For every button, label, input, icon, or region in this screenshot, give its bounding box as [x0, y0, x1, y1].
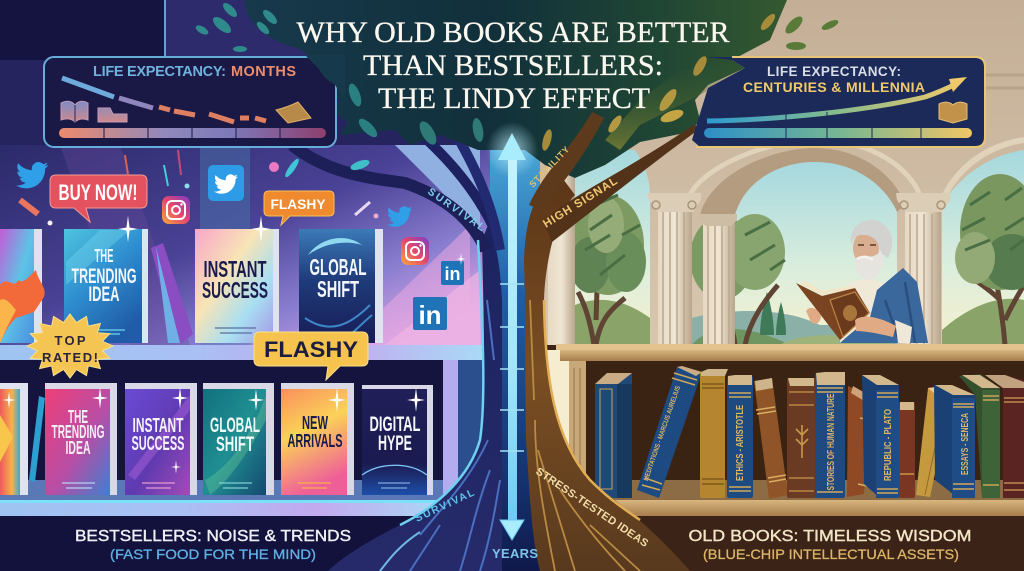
panel: bestsellers background	[0, 0, 520, 571]
book: tilted blue spine	[29, 396, 45, 482]
book: The Trending Idea, top row: IDEA	[88, 283, 120, 306]
label: stress-tested ideas: STRESS-TESTED IDEAS	[533, 466, 650, 550]
book: The Trending Idea, top row: TRENDING	[72, 265, 136, 288]
icon: twitter bird, right	[387, 206, 412, 227]
caption: bestsellers: (FAST FOOD FOR THE MIND)	[110, 546, 316, 562]
badge: flashy, orange: FLASHY	[270, 197, 326, 212]
tree trunk and roots: right	[524, 175, 690, 571]
book: Instant Success, bottom row	[125, 383, 197, 495]
olive trees	[570, 174, 1024, 345]
icon: instagram, upper	[162, 196, 190, 224]
rising arrow	[707, 83, 958, 121]
book: The Trending Idea, bottom row: IDEA	[66, 438, 90, 458]
bookshelf: bestsellers shelves	[0, 345, 482, 516]
book: Global Shift, bottom row: GLOBAL	[210, 414, 260, 437]
book: New Arrivals, bottom row	[281, 383, 354, 495]
confetti	[20, 150, 378, 226]
icon: linkedin small: in	[444, 264, 460, 284]
label: stability: STABILITY	[527, 144, 571, 189]
tree canopy	[245, 0, 787, 178]
book: blue unmarked	[595, 373, 632, 498]
book: Essays by Seneca: ESSAYS - SENECA	[960, 413, 971, 475]
book: small red volume	[899, 402, 915, 498]
icon: open book	[939, 102, 967, 123]
tree trunk and roots: left	[292, 115, 502, 571]
title: THE LINDY EFFECT	[378, 82, 650, 115]
book: tilted purple spine	[151, 243, 193, 343]
book: Republic by Plato	[862, 375, 899, 498]
icon: linkedin large: in	[418, 300, 442, 330]
foliage over months panel	[305, 55, 345, 100]
book: The Trending Idea, top row: THE	[94, 246, 114, 266]
badge: flashy, large gold: FLASHY	[264, 337, 358, 362]
book: brown tome	[787, 378, 816, 498]
panel: life expectancy months: MONTHS	[231, 64, 296, 80]
book: Global Shift, top row: SHIFT	[317, 276, 359, 302]
book: Digital Hype, bottom row	[362, 385, 433, 495]
icon: linkedin small	[441, 253, 466, 285]
book: New Arrivals, bottom row: NEW	[302, 413, 328, 433]
book: Instant Success, top row	[195, 216, 279, 343]
icon: instagram, right	[401, 237, 429, 265]
book: Republic by Plato: REPUBLIC - PLATO	[883, 409, 894, 481]
badge: top rated	[27, 314, 113, 378]
book: Digital Hype, bottom row: HYPE	[378, 432, 412, 455]
panel: life expectancy centuries: CENTURIES & MILLENNIA	[743, 79, 925, 95]
panel heading: LIFE EXPECTANCY:	[767, 64, 901, 79]
title	[296, 16, 730, 115]
bookshelf: old books	[520, 344, 1024, 571]
badge: flashy, orange	[264, 191, 334, 225]
book: The Trending Idea, bottom row: TRENDING	[52, 422, 104, 442]
panel: life expectancy months	[44, 57, 336, 147]
label: survival on branch: SURVIVAL	[425, 186, 488, 234]
book: Global Shift, bottom row	[203, 383, 274, 495]
book: New Arrivals, bottom row: ARRIVALS	[288, 431, 342, 451]
timeline bar	[704, 128, 972, 138]
icon: worn golden book	[276, 102, 311, 123]
columns and capitals	[548, 165, 950, 350]
timeline bar	[59, 128, 326, 138]
badge: top rated: RATED!	[42, 350, 98, 365]
book: Ethics by Aristotle	[727, 375, 753, 498]
central years arrow	[486, 122, 538, 561]
book: The Trending Idea, top row	[64, 216, 148, 343]
book: maroon volume	[985, 375, 1024, 498]
book: The Trending Idea, bottom row	[45, 383, 117, 495]
badge: buy now	[50, 175, 147, 222]
leaves	[194, 1, 840, 172]
book: Stories of Human Nature: STORIES OF HUMAN NATURE	[826, 393, 837, 490]
book: Instant Success, top row: SUCCESS	[202, 277, 268, 303]
badge: buy now: BUY NOW!	[58, 180, 138, 205]
book: green volume	[959, 374, 1000, 498]
book: Meditations by Marcus Aurelius: MEDITATIONS - MARCUS AURELIUS	[643, 385, 682, 482]
book: Essays by Seneca	[934, 385, 975, 498]
centre band between the trunks	[490, 145, 540, 571]
icon: twitter bird, far left	[16, 162, 48, 188]
panel heading: LIFE EXPECTANCY:	[93, 64, 226, 80]
book: Global Shift, top row: GLOBAL	[310, 254, 366, 280]
icons: crumbling books	[61, 101, 127, 122]
caption: bestsellers: BESTSELLERS: NOISE & TRENDS	[75, 528, 351, 545]
caption: old books: (BLUE-CHIP INTELLECTUAL ASSETS)	[703, 546, 959, 562]
icon: linkedin large	[413, 297, 447, 330]
panel: life expectancy centuries	[692, 57, 985, 147]
label: survival on root: SURVIVAL	[413, 487, 477, 525]
book: Stories of Human Nature	[815, 372, 845, 498]
book: red-brown leaning	[847, 386, 872, 497]
book: top row flame cover	[0, 229, 45, 343]
book: Global Shift, top row	[299, 229, 383, 343]
book: golden volume	[700, 369, 728, 498]
caption: old books: OLD BOOKS: TIMELESS WISDOM	[688, 528, 972, 545]
badge: flashy, large gold	[254, 332, 368, 380]
book: Global Shift, bottom row: SHIFT	[216, 433, 254, 456]
book: Meditations by Marcus Aurelius	[637, 366, 702, 498]
book: Digital Hype, bottom row: DIGITAL	[370, 413, 421, 436]
caption: bestsellers	[75, 528, 351, 562]
caption: old books	[688, 528, 972, 562]
book: Instant Success, bottom row: INSTANT	[132, 415, 184, 437]
label: high signal: HIGH SIGNAL	[541, 175, 620, 231]
decay line	[62, 78, 114, 97]
book: brown leaning	[754, 378, 788, 499]
icon: twitter square	[208, 165, 244, 201]
book: yellow leaning	[916, 387, 951, 497]
upper branches: right tree	[527, 112, 698, 242]
book: The Trending Idea, bottom row: THE	[68, 407, 88, 427]
badge: top rated: TOP	[54, 333, 86, 348]
book: Ethics by Aristotle: ETHICS - ARISTOTLE	[735, 405, 746, 481]
years label: YEARS	[492, 546, 538, 561]
panel: old books background	[520, 0, 1024, 350]
philosopher reading a book	[796, 220, 928, 343]
book: Instant Success, bottom row: SUCCESS	[132, 433, 184, 455]
book: Instant Success, top row: INSTANT	[204, 256, 266, 282]
title: WHY OLD BOOKS ARE BETTER	[296, 16, 730, 49]
title: THAN BESTSELLERS:	[363, 49, 663, 82]
book: bottom row gradient edge	[0, 383, 28, 495]
hills and cypresses	[575, 292, 1024, 345]
